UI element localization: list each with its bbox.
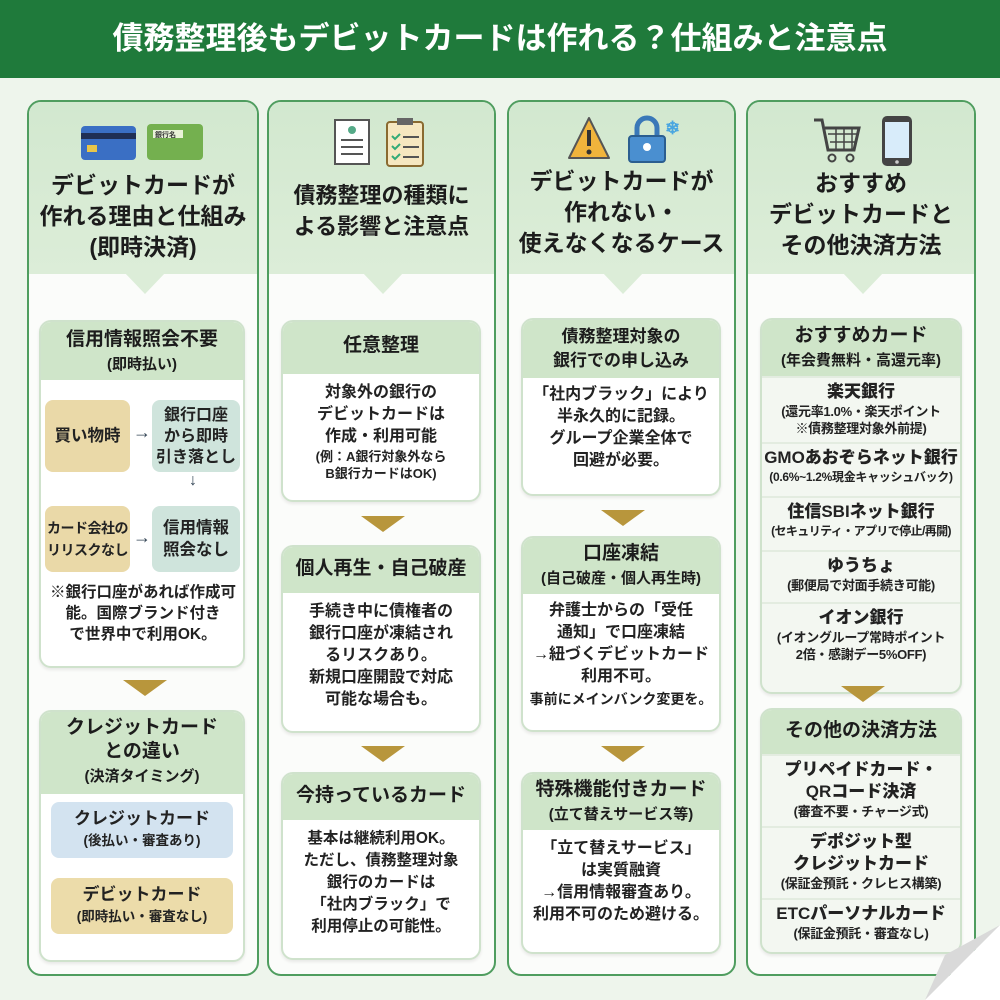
flow: 銀行口座: から即時 <box>164 428 228 444</box>
heading col3: 作れない・ <box>564 199 679 225</box>
item: デポジット型: (保証金預託・クレヒス構築) <box>781 876 941 891</box>
box: 口座凍結: (自己破産・個人再生時) <box>541 570 701 587</box>
note: 能。国際ブランド付き <box>65 605 220 622</box>
note: で世界中で利用OK。 <box>69 626 217 643</box>
box: 債務整理対象の銀行での申し込み: 銀行での申し込み <box>553 351 689 370</box>
item: デポジット型 <box>762 826 960 898</box>
arrow: triangle <box>361 516 405 532</box>
box: 今持っているカード: 「社内ブラック」で <box>311 896 451 913</box>
credit <box>51 802 233 858</box>
item: プリペイド <box>762 754 960 826</box>
box: 今持っているカード: 銀行のカードは <box>327 874 435 891</box>
note: ※銀行口座があれば作成可 <box>50 584 236 601</box>
heading col3: デビットカードが <box>530 168 714 194</box>
box: おすすめカード: (年会費無料・高還元率) <box>781 352 941 369</box>
item: ゆうちょ <box>762 550 960 602</box>
box: 任意整理: デビットカードは <box>317 406 445 423</box>
icon: cards: 銀行名 <box>155 130 176 139</box>
heading col1: デビットカードが <box>51 172 235 198</box>
flow: カード会社: リリスクなし <box>47 542 128 558</box>
arrow down: ↓ <box>189 472 197 489</box>
item: GMO <box>762 442 960 496</box>
box: 個人再生・自己破産: 銀行口座が凍結され <box>309 625 453 642</box>
title bar <box>0 0 1000 78</box>
box: 今持っているカード: 今持っているカード <box>296 785 466 806</box>
box: 任意整理 <box>281 320 481 502</box>
item: プリペイド: QRコード決済 <box>806 782 916 801</box>
box: おすすめカード: おすすめカード <box>794 325 928 346</box>
box: 信用情報照会不要: (即時払い) <box>107 356 177 373</box>
box: 債務整理対象の銀行での申し込み: 債務整理対象の <box>562 327 680 346</box>
item: GMO: (0.6%~1.2%現金キャッシュバック) <box>769 470 953 484</box>
flow: 信用情報照会なし: 信用情報 <box>163 519 229 537</box>
item: GMO: GMOあおぞらネット銀行 <box>764 448 958 467</box>
heading col2 <box>293 183 470 239</box>
note <box>50 584 236 643</box>
heading col4: その他決済方法 <box>780 232 942 258</box>
box: 今持っているカード <box>281 772 481 960</box>
item: 楽天銀行: ※債務整理対象外前提) <box>795 421 927 436</box>
box: 特殊機能付きカード: 特殊機能付きカード <box>535 779 706 800</box>
box: 債務整理対象の銀行での申し込み: 回避が必要。 <box>573 452 669 469</box>
heading col1: 作れる理由と仕組み <box>40 203 246 229</box>
flow: カード会社: カード会社の <box>47 520 128 536</box>
box: 口座凍結 <box>521 536 721 732</box>
item: イオン銀行 <box>762 602 960 672</box>
box: 特殊機能付きカード: は実質融資 <box>581 862 661 879</box>
box: 口座凍結: 口座凍結 <box>583 543 659 564</box>
item: デポジット型: クレジットカード <box>793 854 929 873</box>
box: 今持っているカード: ただし、債務整理対象 <box>303 852 458 869</box>
item: ETC: (保証金預託・審査なし) <box>793 926 929 941</box>
credit: クレジットカード <box>74 809 210 828</box>
icon: cart and phone <box>814 116 912 166</box>
panel: column 2 <box>267 100 496 976</box>
debit: (即時払い・審査なし) <box>77 909 207 924</box>
box: 今持っているカード: 基本は継続利用OK。 <box>307 830 455 847</box>
flow: 銀行口座 <box>152 400 240 472</box>
item: 住信SBI: 住信SBIネット銀行 <box>787 502 935 521</box>
heading col3: 使えなくなるケース <box>519 230 724 256</box>
icon: warning and lock: ❄ <box>665 118 680 138</box>
box: 口座凍結: 利用不可。 <box>581 668 661 685</box>
flow: カード会社 <box>45 506 130 572</box>
item: ETC <box>762 898 960 954</box>
icon: cards <box>81 124 203 160</box>
item: 楽天銀行: (還元率1.0%・楽天ポイント <box>781 404 941 419</box>
box: 任意整理: B銀行カードはOK) <box>325 466 437 481</box>
flow: 銀行口座: 銀行口座 <box>164 406 228 424</box>
item: デポジット型: デポジット型 <box>810 832 912 851</box>
debit: デビットカード <box>82 885 202 904</box>
arrow: triangle <box>123 680 167 696</box>
panel: column 3 <box>507 100 736 976</box>
heading col1 <box>40 172 246 260</box>
debit <box>51 878 233 934</box>
item: ETC: ETCパーソナルカード <box>776 904 946 923</box>
box: 個人再生・自己破産: 手続き中に債権者の <box>309 603 453 620</box>
box: 個人再生・自己破産: 新規口座開設で対応 <box>309 669 453 686</box>
flow: 銀行口座: 引き落とし <box>156 448 236 466</box>
box: 任意整理: (例：A銀行対象外なら <box>316 449 446 464</box>
box: クレジットカードとの違い: (決済タイミング) <box>84 768 200 785</box>
box: 債務整理対象の銀行での申し込み <box>521 318 721 496</box>
box: 特殊機能付きカード <box>521 772 721 954</box>
box: 個人再生・自己破産 <box>281 545 481 733</box>
item: プリペイド: (審査不要・チャージ式) <box>794 804 928 819</box>
heading col4: デビットカードと <box>769 201 953 227</box>
box: クレジットカードとの違い <box>39 710 245 962</box>
item: ゆうちょ: (郵便局で対面手続き可能) <box>787 578 935 593</box>
item: プリペイド: プリペイドカード・ <box>784 760 938 779</box>
box: 個人再生・自己破産: 可能な場合も。 <box>325 691 437 708</box>
box: 信用情報照会不要 <box>39 320 245 668</box>
panel: column 1 <box>27 100 259 976</box>
icon: documents <box>334 118 424 167</box>
credit: (後払い・審査あり) <box>84 833 200 848</box>
flow: 買い物時 <box>45 400 130 472</box>
heading col4: おすすめ <box>815 170 907 196</box>
page curl <box>925 926 1000 1000</box>
heading col3 <box>519 168 724 256</box>
box: その他の決済方法 <box>760 708 962 954</box>
icon: warning and lock <box>568 116 680 163</box>
box: 個人再生・自己破産: 個人再生・自己破産 <box>295 558 466 579</box>
box: 特殊機能付きカード: →信用情報審査あり。 <box>541 884 701 901</box>
box: 任意整理: 対象外の銀行の <box>325 384 437 401</box>
heading col2: 債務整理の種類に <box>293 183 470 208</box>
item: 楽天銀行 <box>762 376 960 442</box>
box: その他の決済方法: その他の決済方法 <box>785 720 937 741</box>
box: おすすめカード <box>760 318 962 694</box>
box: 債務整理対象の銀行での申し込み: 「社内ブラック」により <box>533 386 709 403</box>
box: 口座凍結: 事前にメインバンク変更を。 <box>530 691 712 707</box>
item: 住信SBI: (セキュリティ・アプリで停止/再開) <box>771 524 951 538</box>
box: 任意整理: 任意整理 <box>343 335 419 356</box>
item: ゆうちょ: ゆうちょ <box>827 556 895 575</box>
box: 今持っているカード: 利用停止の可能性。 <box>311 918 451 935</box>
box: 債務整理対象の銀行での申し込み: グループ企業全体で <box>549 430 693 447</box>
arrow: triangle <box>361 746 405 762</box>
box: 口座凍結: 弁護士からの「受任 <box>549 602 693 619</box>
arrow: → <box>133 527 151 547</box>
panel: column 4 <box>746 100 976 976</box>
box: 債務整理対象の銀行での申し込み: 半永久的に記録。 <box>557 408 685 425</box>
box: 口座凍結: →紐づくデビットカード <box>533 646 709 663</box>
flow: 信用情報照会なし <box>152 506 240 572</box>
item: イオン銀行: (イオングループ常時ポイント <box>777 630 945 645</box>
box: 口座凍結: 通知」で口座凍結 <box>557 624 685 641</box>
box: 個人再生・自己破産: るリスクあり。 <box>325 647 437 664</box>
arrow: → <box>133 422 151 442</box>
flow: 信用情報照会なし: 照会なし <box>163 541 229 559</box>
box: 任意整理: 作成・利用可能 <box>325 428 437 445</box>
title bar: 債務整理後もデビットカードは作れる？仕組みと注意点 <box>112 21 888 56</box>
item: イオン銀行: イオン銀行 <box>818 608 904 627</box>
arrow: triangle <box>841 686 885 702</box>
box: 信用情報照会不要: 信用情報照会不要 <box>66 329 218 350</box>
heading col1: (即時決済) <box>89 234 197 260</box>
box: クレジットカードとの違い: との違い <box>104 741 180 762</box>
box: 特殊機能付きカード: (立て替えサービス等) <box>549 806 693 823</box>
box: クレジットカードとの違い: クレジットカード <box>66 717 218 738</box>
arrow: triangle <box>601 746 645 762</box>
flow: 買い物時: 買い物時 <box>54 427 120 445</box>
box: 特殊機能付きカード: 「立て替えサービス」 <box>541 840 701 857</box>
item: 住信SBI <box>762 496 960 550</box>
heading col2: よる影響と注意点 <box>294 214 469 239</box>
heading col4 <box>769 170 953 258</box>
item: 楽天銀行: 楽天銀行 <box>827 382 895 401</box>
arrow: triangle <box>601 510 645 526</box>
box: 特殊機能付きカード: 利用不可のため避ける。 <box>533 906 709 923</box>
item: イオン銀行: 2倍・感謝デー5%OFF) <box>796 647 926 662</box>
